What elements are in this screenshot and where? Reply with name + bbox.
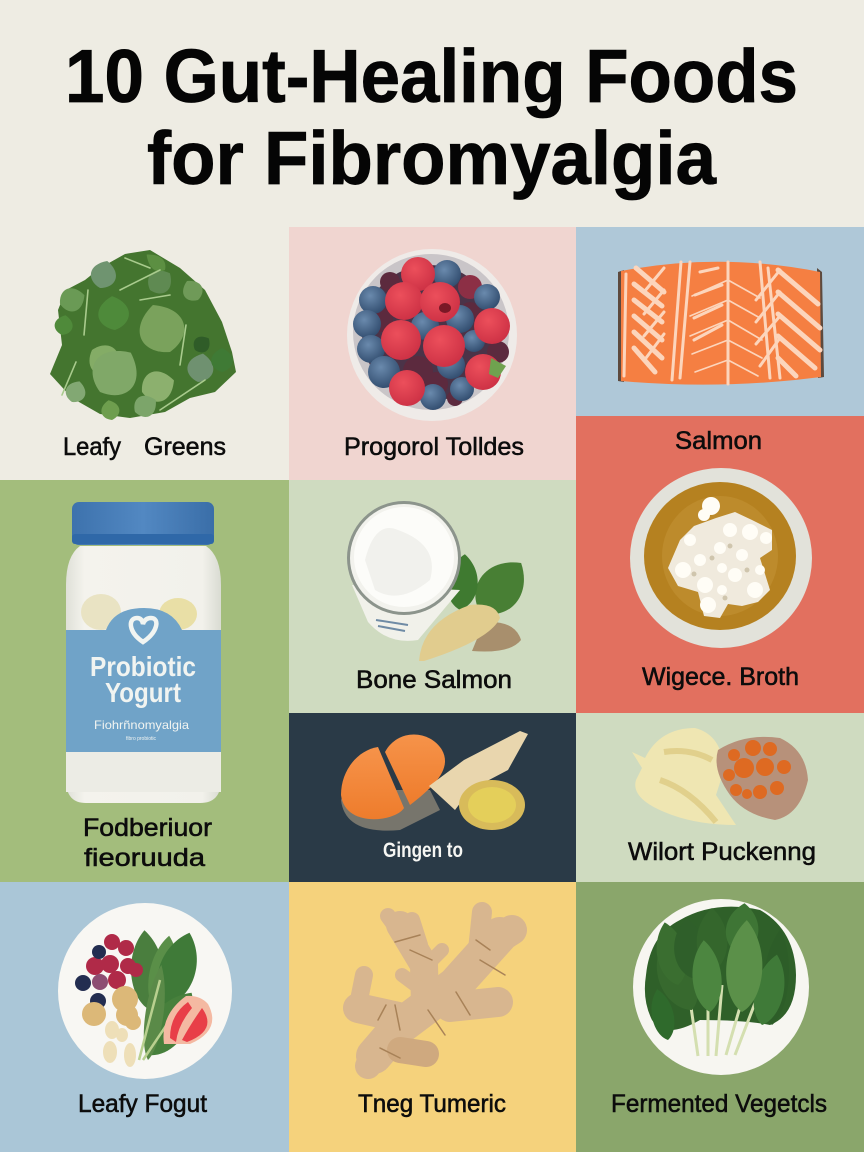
label: fieoruuda bbox=[84, 844, 205, 872]
panel: ginger and orange bbox=[289, 713, 576, 882]
icon: ginger root bbox=[358, 912, 512, 1066]
label: Greens bbox=[144, 433, 226, 461]
label: Salmon bbox=[675, 427, 762, 455]
icon: mixed food plate bbox=[58, 903, 232, 1079]
cauliflower bbox=[82, 986, 141, 1030]
panel: bone salmon bbox=[289, 480, 576, 713]
icon: orange and ginger bbox=[341, 731, 528, 831]
label: Progorol Tolldes bbox=[344, 433, 524, 461]
icon: broth bowl bbox=[630, 468, 812, 648]
jar label text: Fiohrñnomyalgia bbox=[94, 718, 189, 732]
berries bbox=[86, 934, 143, 990]
jar label text bbox=[90, 651, 196, 742]
label: Wigece. Broth bbox=[642, 663, 799, 691]
icon: yogurt jar bbox=[66, 502, 221, 803]
jar label text: Probiotic bbox=[90, 651, 196, 682]
label: Leafy Fogut bbox=[78, 1090, 207, 1118]
label: Leafy bbox=[63, 433, 121, 461]
title: 10 Gut-Healing Foods bbox=[65, 34, 798, 118]
panel: leafy yogurt plate bbox=[0, 882, 289, 1152]
label: Wilort Puckenng bbox=[628, 838, 816, 866]
title: for Fibromyalgia bbox=[147, 116, 717, 200]
icon: berry bowl bbox=[347, 249, 517, 421]
icon: grapefruit bbox=[163, 996, 212, 1044]
icon: leafy greens bbox=[50, 249, 236, 422]
panel: leafy greens bbox=[0, 227, 289, 480]
label: Bone Salmon bbox=[356, 666, 512, 694]
panel: turmeric bbox=[289, 882, 576, 1152]
panel: probiotic yogurt bbox=[0, 480, 289, 882]
jar label text: fibro probiotic bbox=[126, 736, 157, 742]
jar label text: Yogurt bbox=[105, 677, 181, 708]
label: Tneg Tumeric bbox=[358, 1090, 506, 1118]
icon: salmon fillet bbox=[618, 262, 824, 385]
panel: fermented vegetables bbox=[576, 882, 864, 1152]
icon: yogurt cup with ginger bbox=[347, 501, 538, 661]
label: Gingen to bbox=[383, 839, 463, 862]
panel: berries bbox=[289, 227, 576, 480]
title bbox=[65, 34, 798, 200]
panel: broth bbox=[576, 416, 864, 713]
panel: salmon bbox=[576, 227, 864, 416]
panel: wilort puckenng bbox=[576, 713, 864, 882]
leaves bbox=[128, 927, 207, 1065]
icon: root and orange seeds bbox=[632, 728, 808, 825]
icon: spinach plate bbox=[633, 899, 809, 1075]
label: Fermented Vegetcls bbox=[611, 1090, 827, 1118]
label: Fodberiuor bbox=[83, 814, 212, 842]
icon: heart bbox=[131, 618, 156, 642]
label bbox=[83, 814, 212, 872]
title panel bbox=[0, 0, 864, 227]
